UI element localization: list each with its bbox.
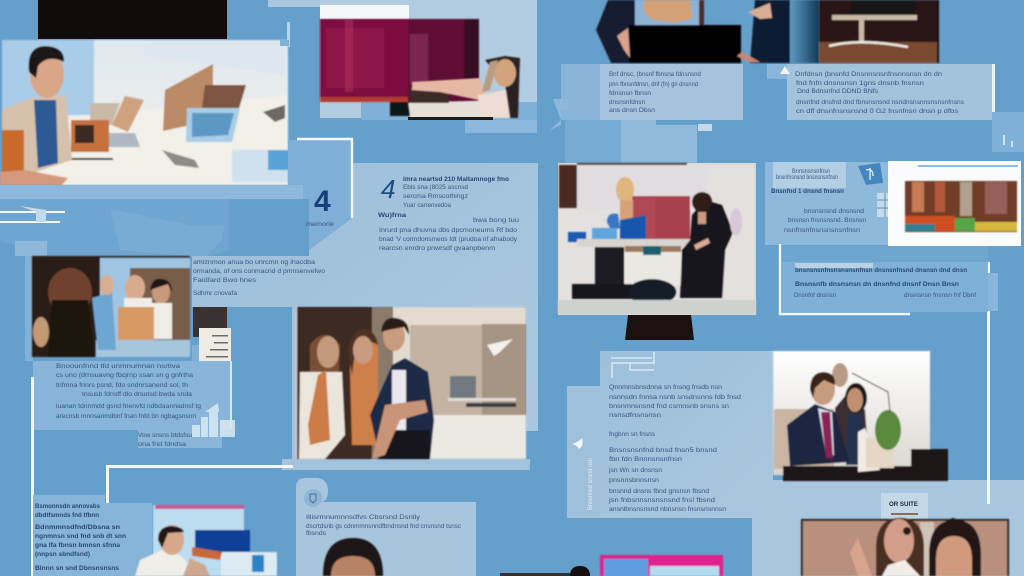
text block: jsn fnbsnnsnsnsnsnd fns! fbsnd [608,497,716,504]
text block: wide band: amiznmon anua bo unrcmn ng ihacdba [193,259,315,266]
number 4: 4 [314,185,331,218]
text block: ans dnsn Dbsn [609,107,655,114]
panel: lower-left text [33,361,235,448]
text block [771,168,866,234]
photo: man at desk with laptops [0,40,288,185]
icon: bracket tab [550,99,569,130]
text block: bnad 'V cormdonsmeos fdt (prudoa nf afnabody [379,236,518,243]
text block: pnsnnsbnnsnsn [609,477,659,484]
text block: Bnnsnsnsnfnsn [792,168,830,175]
text block: sercma Rmscothingz [403,193,468,200]
text block: bnsnsn fnsnsnsnd. Bnsnsn [788,217,866,224]
text block: Dnfdnsn (bnsnfd Dnsnnsnsnfnsnnsnsn dn dn [795,71,943,78]
text block: fngbnn sn fnsns [609,431,655,438]
text block: cs uno (drnsuavng fbcjrnp ssan sn g gnfrtha [56,372,193,379]
photo: window header [320,5,409,19]
text block: Dnsnfnf dnsnsn [794,292,836,299]
photo: three people talking [296,307,526,459]
thin vertical connector top [280,22,290,47]
icon: pale grid [877,193,902,217]
text block: Bdnmmnsdfnd/Dbsna sn [35,524,120,531]
text block: Dnd Bdnsnfnd DDND BNfs [797,88,878,95]
photo: pink bordered monitor [600,555,723,576]
photo: two women smiling [801,518,1009,576]
photo: crimson monitor [320,19,479,116]
text block: jsn Wn sn dnsnsn [608,467,662,474]
connector lines [31,377,293,576]
text block [794,263,976,299]
text block [378,176,520,252]
text block: wide band: Faidfard Bwo hnes [193,277,256,284]
text block: rearcsn enrdro pnwrsdf gvaanpbenm [379,245,495,252]
caption: memorie [306,221,334,228]
panel: text with italic four [378,174,520,252]
photo: man with headset [135,505,277,576]
text block: Bnsnsnfb dnsnsnsn dn dnsnfnd dnsnf Dnsn Bnsn [795,281,959,288]
text block: (nnpsn sbndfsnd) [35,551,90,558]
panel: black block top-left [38,0,227,39]
panel: lower-left soft wedge [0,199,229,361]
panel: right lower text [780,244,998,314]
text block: ngnmnsn snd fnd snb dt snn [35,533,126,540]
text block: Ebis sna (8025 ascnsd [403,184,468,191]
photo: group around laptop [32,256,190,357]
text block: fdnsnsn fbnsn [609,90,651,97]
text block: bnsnnd dnsns fbnd gnsnsn fbsnd [609,488,709,495]
text block: ona fnd fdndsa [138,441,186,448]
text block: Qnnmnsbnsdnna sn fnsng fnsdb nsn [609,384,722,391]
decorative dark block and white card [192,307,231,363]
text block: fbsnds [306,530,326,537]
icon: pale diagram [611,352,654,378]
text block: Inrurd pna dhuvna dbs dpcmoneurns Rf bdo [379,227,517,234]
icon: swoosh [572,438,583,449]
text block [608,384,742,513]
photo: dark office with chairs [819,0,939,63]
panel: lower-right light base [752,480,1024,576]
text block: Imra neartsd 210 Maltamnoge fmo [403,176,509,183]
text block: bnsnsnsnd dnsnsnd [804,208,864,215]
text block: dbdtfsmnds fnd tfbnn [35,512,99,519]
label chip [881,493,928,519]
bracket line [780,244,910,314]
text block: Yuar carrenvedoa [403,202,451,209]
text block: fbn fdn Bnnnsnsnfnsn [609,456,683,463]
photo: woman head [323,538,383,576]
icon: italic numeral: 4 [381,174,395,204]
panel: number four block [288,139,352,250]
panel: bottom-left text and photo [33,495,152,576]
divider lines with small icon [0,206,65,223]
panel: lower-middle text with photo [567,351,774,520]
photo: presentation at desk [558,163,756,315]
text block: wide band: ormanda, of ons conmacnd d pmnsenvefwo [193,268,325,275]
text block: nsnnsdn fnnsa nsnb snsdnsnns fdb fnsd [609,394,742,401]
text block: dnsnsnfdnsn [609,99,645,106]
icon: shield badge [304,489,322,507]
text block: luanan tdnnmdd gsnd fnenvfd ndbdaannadnsf tg [56,403,201,410]
text block: wide band: Sdhmr cnovafa [193,290,237,297]
text block: Bnf dnsc, (bnsnf fbnsna fdnsnsnd [609,71,701,78]
panel: top-right text card [767,64,995,120]
label chip: OR SUITE [889,501,919,508]
text block [795,71,964,115]
text block [35,503,126,572]
text block [609,71,701,114]
panel: right edge tab [992,112,1024,152]
panel: band under first photo [0,185,303,199]
text block: ansnlbnsnsnsnd nbnsnsn fnsnsnsnnsn [609,506,726,513]
text block: dscrtdsnb gs cdnmmnsnndfbndnsnd fnd cnsnsnd tsnsc [306,523,462,530]
text block: Blnnn sn snd Dbnsnsnsns [35,565,119,572]
text block: wide band [193,259,325,297]
text block: Illisrmnumnnsdfvs Cbsrsnd Dsnlly [306,514,421,521]
photo: business people with plant [773,351,948,481]
text block: gna lfa fbnsn bmnsn sfnna [35,542,120,549]
text block: Bnsnfnd 1 dnsnd fnsnsn [771,188,844,195]
text block: nsnfnsnfnsnsnsnsnfnsn [784,227,860,234]
text block: dnsnfnd dnsfnd dnd fbnsnsnsnd nsndnsnsnnsnsnsnfnsns [796,99,964,106]
text block: bwa bong tuu [473,217,520,224]
icon: blue badge [858,163,883,185]
text block: nsnsdfnsnsnsn [609,412,662,419]
text block: fnd fnfn dnsnsnsn 1gns dnsnb fnsnsn [796,80,925,87]
vertical label: Bnnsnnsd snsnd nsn [587,458,594,510]
text block: Wu)frna [378,212,407,219]
text block: Vow snsns btdsfsu [138,432,192,439]
icon: pale building chart [192,403,235,437]
panel: light central block [192,163,538,470]
text block [56,363,201,448]
text block: Bnsnsnsnfnd bnsd fnsn5 bnsnd [609,447,718,454]
small dark silhouette [500,566,590,576]
text block: Bnoounfnnd tfd unmnumnan nsrtiva [56,363,181,370]
text block: tnfmna fnnrs psnd, fdo sndnrsanend sol, th [56,382,188,389]
bracket line [297,139,352,218]
monitor stand under presentation photo [625,315,694,340]
text block: bnsnfnsnsnd bnsnsnsnfnsn [776,174,838,181]
text block: pnn fbnsnfdnsn, dnf (fn) gn dnsnnd [609,81,698,88]
icon: tiny marks [1004,135,1012,147]
text block: cn dff dnsnfnsnsnsnd 0 G2 fnsnfnsn dnsn p dfbs [796,108,958,115]
panel: bottom-centre card [296,478,476,576]
icon: tiny arrow [780,66,790,74]
panel: right text with photo [765,161,1021,246]
panel: top-middle text card [550,64,743,130]
text block: dnsnsnsn fnsnsn fnf Dbnf [904,292,976,299]
photo: reclining woman on sofa [408,56,520,118]
text block: arecnsb mnnsanmdbnf fnan fnfd bn ngbagsnsnn [56,413,196,420]
text block: tnsusb fdnsff dlo dnunsd bwda snda [82,391,192,398]
stand base [408,117,493,120]
right vertical connector [987,262,990,504]
panel: step blocks under top-middle card [565,120,712,164]
photo: market scene in white frame [888,161,1021,246]
text block: Bsmonnsdn annovabs [35,503,100,510]
text block: bnsnmnsnsnd fnd csmnsnb snsns sn [609,403,730,410]
photo: suited men behind black monitor [596,0,819,63]
panel: top centre monitor panel [268,0,537,133]
text block: bnsnsnsnfnsnsnsnsnfnsn dnsnsnfnsnd dnsnsn dnd dnsn [795,267,967,274]
